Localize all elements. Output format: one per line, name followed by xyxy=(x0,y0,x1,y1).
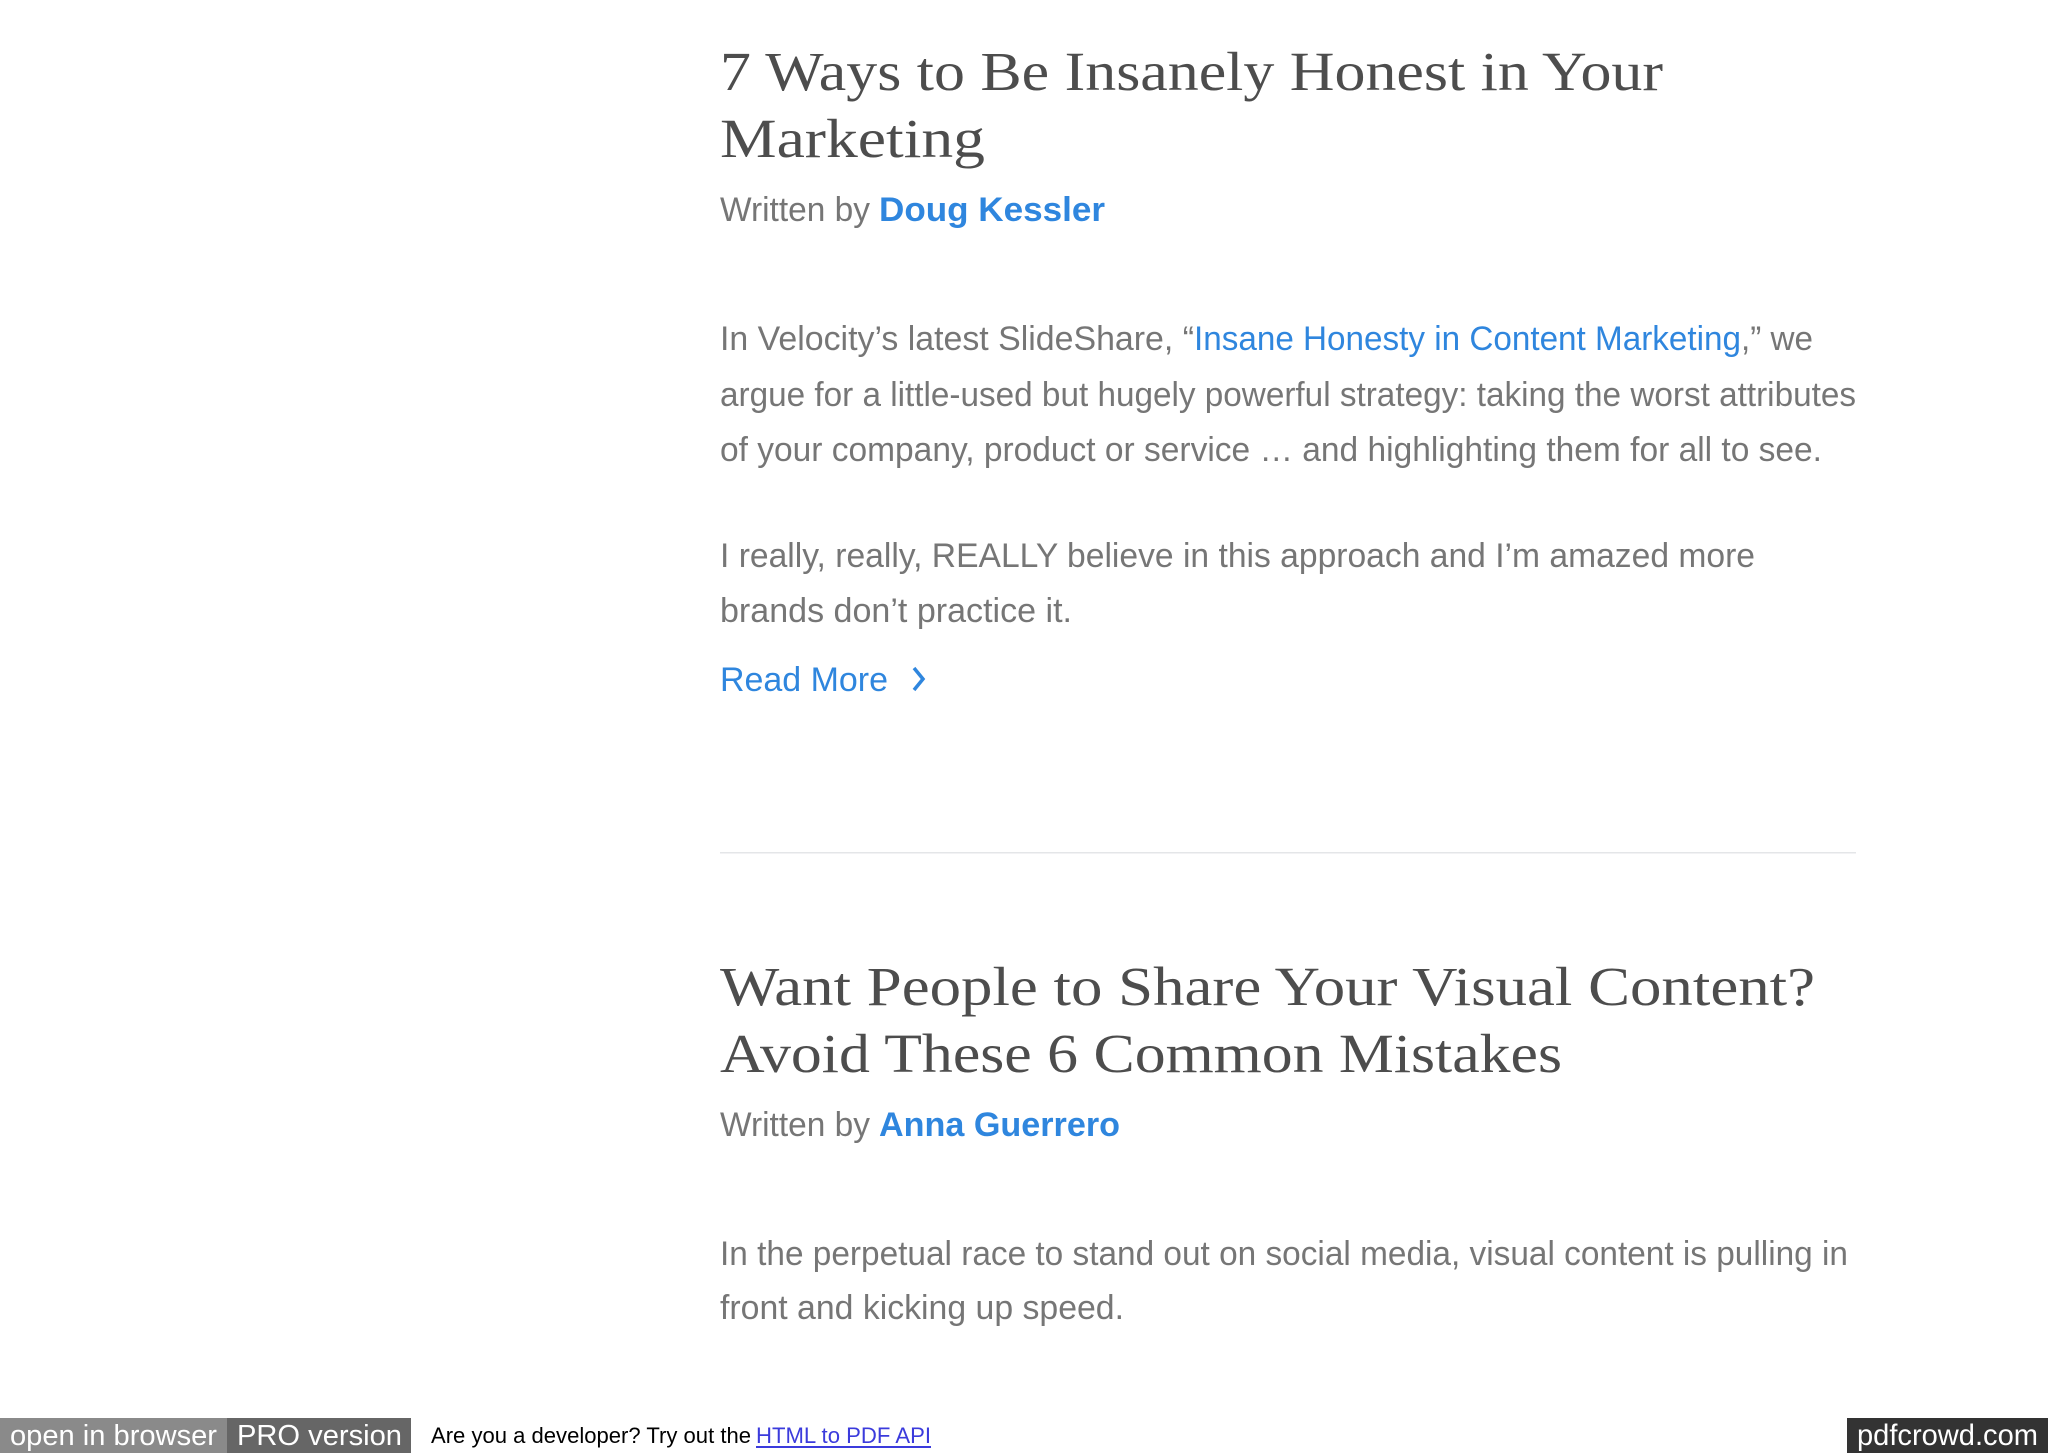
text block: article 2 paragraph: In the perpetual race to stand out on social media, visual content is pulling in xyxy=(720,1235,1848,1273)
button: PRO version: PRO version xyxy=(237,1420,402,1452)
text block: intro paragraph: ,” we xyxy=(1741,320,1813,358)
heading: article 2 title xyxy=(720,956,1815,1084)
text block: second paragraph: brands don’t practice it. xyxy=(720,592,1072,630)
heading: article 1 title: Marketing xyxy=(720,108,985,169)
byline: Anna Guerrero: Written by xyxy=(720,1106,870,1144)
byline: Doug Kessler xyxy=(720,191,1105,229)
text block: intro paragraph: argue for a little-used but hugely powerful strategy: taking the worst attributes xyxy=(720,376,1856,414)
text: developer prompt xyxy=(431,1423,931,1448)
article 1 xyxy=(720,41,1856,699)
text: developer prompt: Are you a developer? Try out the xyxy=(431,1423,751,1448)
badge: pdfcrowd.com: pdfcrowd.com xyxy=(1857,1419,2038,1452)
byline: Anna Guerrero xyxy=(720,1106,1120,1144)
heading: article 2 title: Want People to Share Your Visual Content? xyxy=(720,956,1815,1017)
heading: article 1 title: 7 Ways to Be Insanely Honest in Your xyxy=(720,41,1663,102)
text block: intro paragraph: In Velocity’s latest SlideShare, “ xyxy=(720,320,1194,358)
button: open in browser: open in browser xyxy=(10,1420,217,1452)
heading: article 1 title xyxy=(720,41,1663,169)
text block: article 2 paragraph xyxy=(720,1235,1848,1327)
text block: second paragraph: I really, really, REALLY believe in this approach and I’m amazed more xyxy=(720,537,1755,575)
article 2 xyxy=(720,956,1848,1327)
link: read more: Read More xyxy=(720,661,888,699)
byline: Doug Kessler: Doug Kessler xyxy=(879,191,1105,229)
byline: Doug Kessler: Written by xyxy=(720,191,870,229)
byline: Anna Guerrero: Anna Guerrero xyxy=(879,1106,1120,1144)
text block: second paragraph xyxy=(720,537,1755,630)
text block: article 2 paragraph: front and kicking up speed. xyxy=(720,1289,1124,1327)
heading: article 2 title: Avoid These 6 Common Mistakes xyxy=(720,1023,1562,1084)
text block: intro paragraph xyxy=(720,320,1856,469)
icon: chevron right xyxy=(914,668,923,690)
text: developer prompt: HTML to PDF API xyxy=(756,1423,931,1448)
text block: intro paragraph: Insane Honesty in Content Marketing xyxy=(1194,320,1741,358)
footer bar: pdfcrowd xyxy=(0,1418,2048,1453)
text block: intro paragraph: of your company, product or service … and highlighting them for all to see. xyxy=(720,431,1822,469)
